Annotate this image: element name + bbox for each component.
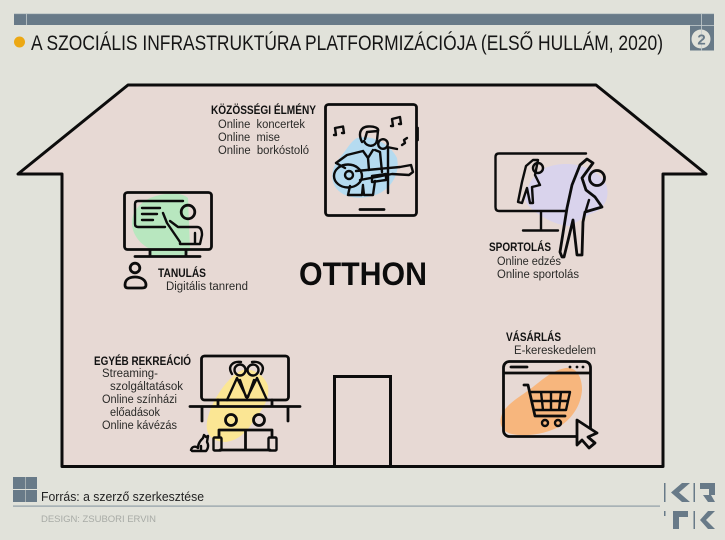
header bar (14, 13, 714, 25)
door (334, 376, 390, 466)
text: recreation list (102, 368, 183, 432)
panel: vásárlás (500, 331, 597, 448)
icon: cat (191, 435, 208, 451)
icon: person (125, 263, 146, 288)
footer squares icon (13, 477, 37, 502)
text: digital curriculum: Digitális tanrend (166, 281, 248, 293)
heading: sportolás: SPORTOLÁS (489, 241, 551, 254)
heading: egyéb rekreáció: EGYÉB REKREÁCIÓ (94, 355, 191, 368)
icon: browser with shopping cart (500, 362, 597, 448)
heading: tanulás: TANULÁS (158, 267, 206, 280)
footer line (13, 506, 660, 507)
page number badge (690, 14, 714, 51)
logo: KRTK (664, 483, 715, 529)
text: recreation list: Online színházi (102, 394, 177, 406)
panel: egyéb rekreáció (94, 355, 300, 451)
text: sports list (497, 256, 579, 281)
panel: tanulás (124, 192, 248, 293)
panel: sportolás (489, 154, 608, 281)
icon: monitor with teacher (124, 192, 212, 288)
page number badge: 2 (697, 32, 706, 48)
text: community list: Online koncertek (218, 119, 305, 131)
center label: otthon: OTTHON (299, 256, 427, 292)
text: recreation list: Streaming- (102, 368, 158, 380)
text: recreation list: előadások (110, 407, 160, 419)
house outline (18, 85, 706, 466)
text: sports list: Online edzés (497, 256, 561, 268)
text: recreation list: Online kávézás (102, 420, 177, 432)
text: sports list: Online sportolás (497, 269, 579, 281)
text: community list: Online borkóstoló (218, 145, 309, 157)
icon: tablet with guitarist (326, 104, 418, 216)
icon: cursor (577, 420, 597, 448)
text: community list: Online mise (218, 132, 280, 144)
text: community list (218, 119, 309, 157)
panel: közösségi élmény (211, 104, 418, 216)
heading: közösségi élmény: KÖZÖSSÉGI ÉLMÉNY (211, 104, 316, 117)
icon: couple watching tv (190, 356, 300, 451)
heading: vásárlás: VÁSÁRLÁS (506, 331, 561, 344)
design credit: DESIGN: ZSUBORI ERVIN (41, 514, 156, 525)
text: e-commerce: E-kereskedelem (514, 345, 596, 357)
text: recreation list: szolgáltatások (110, 381, 183, 393)
icon: monitor with exercising figures (496, 154, 608, 257)
source text: Forrás: a szerző szerkesztése (41, 489, 204, 504)
